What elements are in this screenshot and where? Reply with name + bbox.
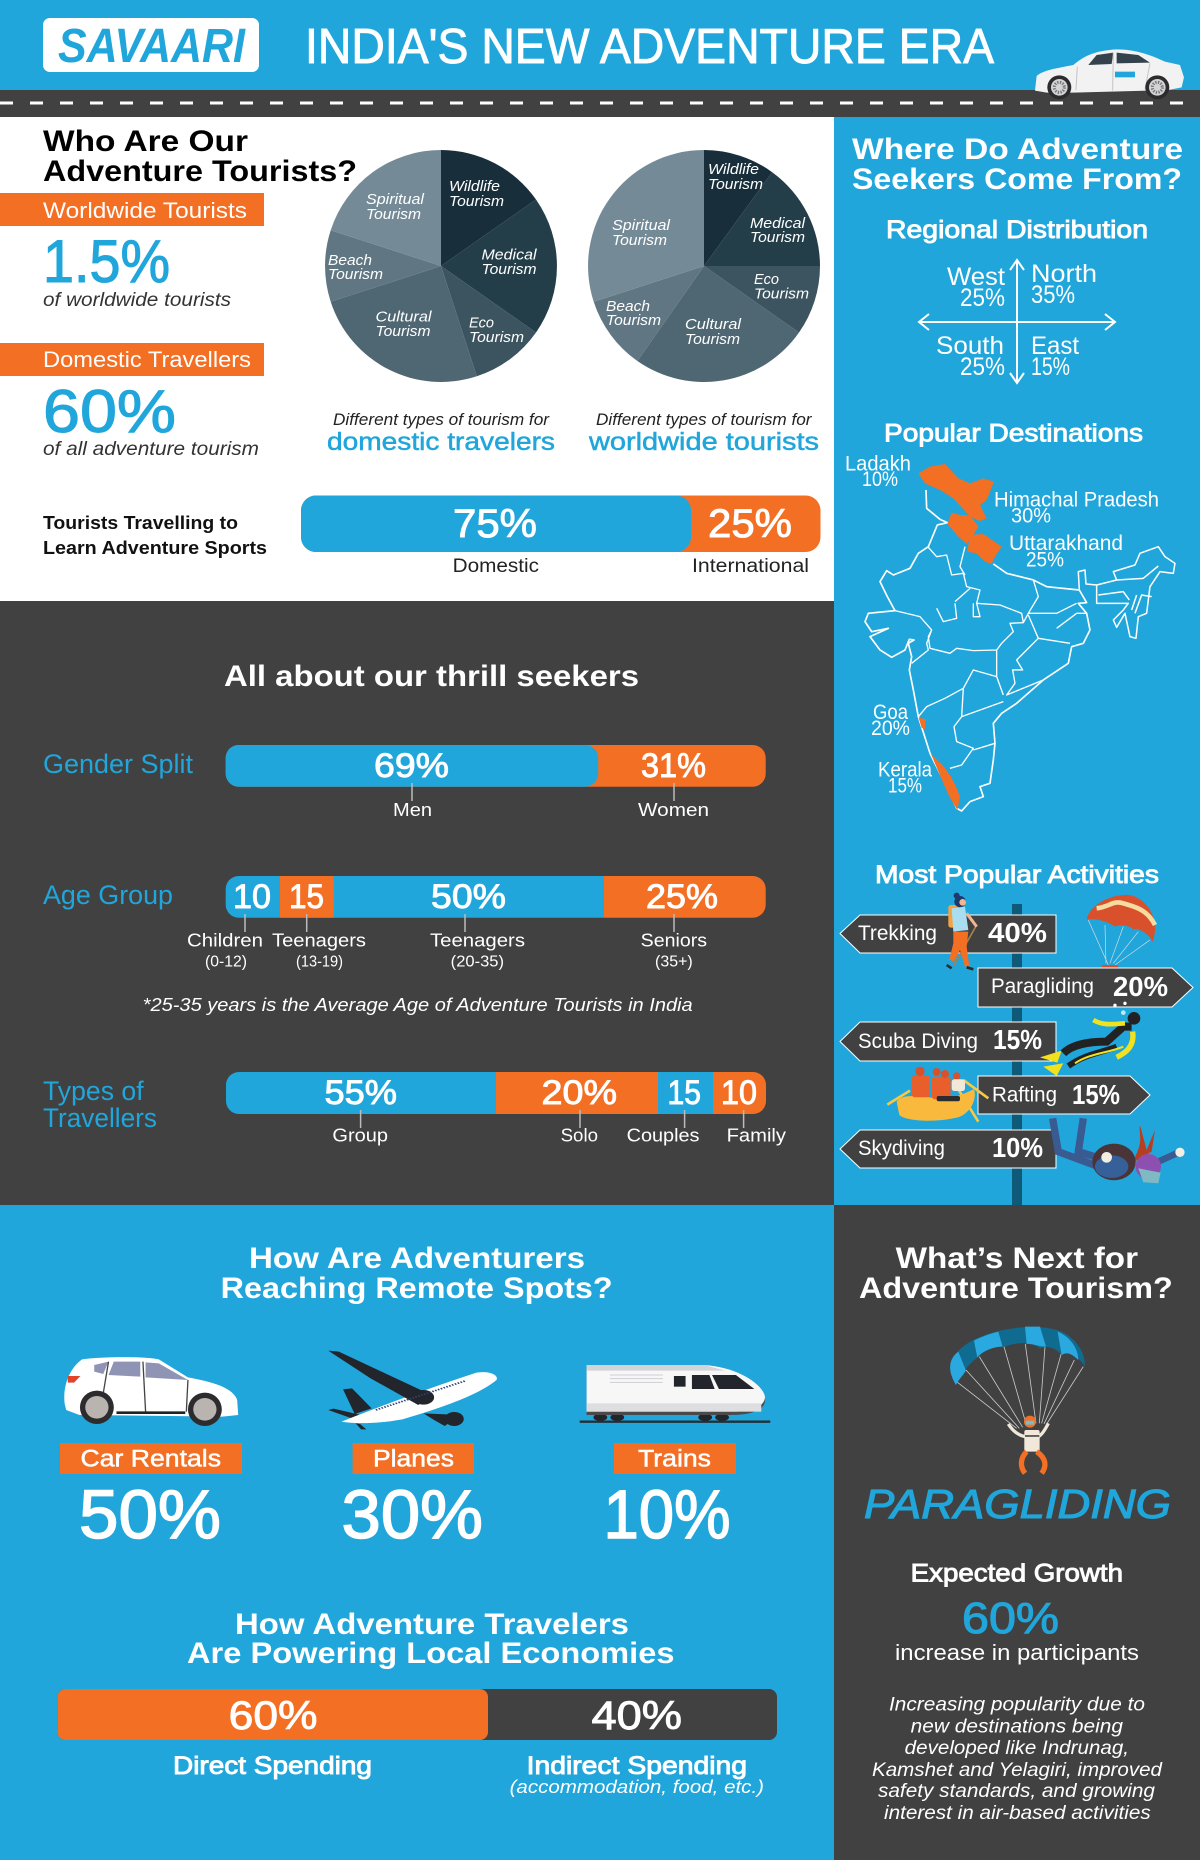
mode: trains [604, 1443, 736, 1553]
stat: expected growth [895, 1560, 1139, 1665]
pie chart: domestic travelers [325, 150, 557, 382]
heading: reaching remote spots: How Are Adventurers [249, 1242, 585, 1275]
chart: regional compass: North [1031, 260, 1097, 288]
map: India with highlighted states [865, 464, 1175, 811]
panel: reaching remote spots and local economies [0, 1205, 834, 1860]
pie chart: worldwide tourists: Tourism [685, 332, 740, 348]
heading: Adventure Tourists? [43, 155, 357, 188]
text block: growth reasons: developed like Indrunag, [905, 1738, 1129, 1759]
heading: Where Do Adventure [852, 133, 1183, 166]
logo: Savaari: SAVAARI [58, 20, 246, 73]
pie chart: worldwide tourists: Tourism [750, 230, 805, 246]
chart: types of travellers: 20% [542, 1074, 617, 1112]
stat: domestic travellers: 60% [43, 378, 176, 445]
chart: regional compass: 15% [1031, 353, 1070, 381]
illustration: skydiver [1053, 1118, 1185, 1183]
text block: growth reasons [872, 1694, 1164, 1824]
heading: local economies [187, 1608, 674, 1670]
chart: gender split: Men [393, 800, 432, 820]
chart: gender split: 31% [641, 747, 706, 785]
pie chart: domestic travelers: Beach [328, 253, 372, 269]
chart: age group: 10 [233, 878, 271, 916]
map labels: Kerala [878, 758, 932, 782]
icon: train [580, 1365, 770, 1422]
chart: types of travellers: Family [727, 1126, 786, 1146]
chart: gender split: Women [638, 800, 709, 820]
pie chart: domestic travelers: Cultural [376, 310, 432, 326]
stat: worldwide tourists: 1.5% [43, 228, 170, 295]
pie chart: worldwide tourists [588, 150, 820, 382]
stat: domestic travellers: Domestic Travellers [43, 347, 251, 372]
heading [859, 1242, 1173, 1305]
map labels: 20% [871, 717, 910, 740]
panel: all about our thrill seekers [0, 601, 834, 1205]
heading: All about our thrill seekers [224, 660, 639, 693]
chart: age group: Age Group [43, 880, 173, 910]
text block: growth reasons: new destinations being [911, 1716, 1123, 1738]
illustration: paraglider red [1087, 895, 1155, 976]
text block: growth reasons: Kamshet and Yelagiri, improved [872, 1760, 1164, 1781]
panel: who are our adventure tourists [0, 117, 834, 601]
mode: car rentals: Car Rentals [80, 1446, 221, 1472]
icon: white SUV [64, 1357, 238, 1426]
chart: age group: Teenagers [272, 930, 366, 950]
map labels: 25% [1026, 548, 1064, 572]
heading: most popular activities: Most Popular Activities [875, 861, 1159, 889]
map labels: 30% [1011, 504, 1051, 528]
stat: worldwide tourists: Worldwide Tourists [43, 198, 247, 223]
note: average age: *25-35 years is the Average Age of Adventure Tourists in India [143, 995, 693, 1015]
caption: worldwide tourists [588, 411, 819, 456]
mode: car rentals [60, 1443, 242, 1553]
pie chart: worldwide tourists: Tourism [708, 177, 763, 193]
chart: types of travellers: Travellers [43, 1103, 157, 1133]
chart: regional compass: East [1031, 332, 1079, 360]
chart: age group: 15 [289, 878, 324, 916]
heading: local economies: How Adventure Travelers [235, 1608, 629, 1641]
chart: types of travellers: 10 [721, 1074, 757, 1112]
illustration: paraglider blue [950, 1327, 1085, 1473]
pie chart: worldwide tourists: Tourism [606, 313, 661, 329]
chart: age group: Seniors [641, 930, 707, 950]
bar chart: domestic vs international: 75% [453, 502, 537, 546]
map labels: 15% [888, 774, 922, 798]
heading: Who Are Our [43, 125, 248, 158]
sign: Paragliding [978, 968, 1193, 1007]
chart: age group: Children [187, 930, 263, 950]
bar chart: direct vs indirect spending: 60% [229, 1694, 318, 1738]
map labels: Himachal Pradesh [994, 488, 1159, 512]
stat: domestic travellers [0, 343, 264, 460]
map labels: 10% [862, 468, 898, 491]
bar chart: direct vs indirect spending: 40% [592, 1694, 682, 1738]
map labels: Uttarakhand [1009, 532, 1123, 555]
chart: age group: Teenagers [430, 930, 525, 950]
bar chart: direct vs indirect spending: (accommodation, food, etc.) [510, 1777, 764, 1797]
heading: Adventure Tourism? [859, 1272, 1173, 1305]
pie chart: worldwide tourists: Wildlife [708, 162, 759, 178]
stat: expected growth: 60% [962, 1594, 1059, 1643]
pie chart: domestic travelers: Wildlife [449, 179, 500, 195]
panel: what's next for adventure tourism [834, 1205, 1200, 1860]
pie chart: worldwide tourists: Tourism [612, 233, 667, 249]
sign: Rafting: Rafting [992, 1084, 1057, 1106]
map labels [845, 452, 1159, 798]
stat: domestic travellers: of all adventure tourism [43, 439, 259, 460]
text block: growth reasons: Increasing popularity due to [889, 1694, 1145, 1716]
chart: gender split [43, 745, 766, 820]
sign: Trekking: 40% [988, 917, 1047, 948]
mode: planes [342, 1443, 483, 1553]
chart: types of travellers: Types of [43, 1076, 144, 1106]
text block: growth reasons: safety standards, and growing [878, 1781, 1155, 1802]
pie chart: domestic travelers: Eco [469, 316, 494, 332]
chart: regional compass: 25% [960, 353, 1005, 381]
sign: Rafting [978, 1076, 1150, 1114]
stat: worldwide tourists [0, 193, 264, 311]
heading: What’s Next for [896, 1242, 1138, 1275]
icon: white sedan on road [1035, 49, 1184, 99]
pie chart: worldwide tourists: Medical [750, 216, 806, 232]
label: learn adventure sports: Tourists Travelling to [43, 513, 238, 533]
mode: planes: 30% [342, 1476, 483, 1553]
signpost pole [1012, 904, 1022, 1205]
stat: expected growth: increase in participants [895, 1640, 1139, 1665]
pie chart: worldwide tourists: Eco [754, 272, 779, 288]
mode: trains: Trains [638, 1446, 711, 1472]
chart: age group: 50% [431, 878, 506, 916]
pie chart: domestic travelers: Tourism [469, 330, 524, 346]
pie chart: worldwide tourists: Cultural [685, 317, 742, 333]
pie chart: domestic travelers: Spiritual [366, 192, 425, 208]
chart: regional compass: South [936, 332, 1004, 360]
chart: types of travellers [43, 1072, 786, 1146]
map labels: Goa [873, 701, 908, 724]
pie chart: domestic travelers: Medical [482, 248, 537, 264]
sign: Skydiving: 10% [992, 1132, 1043, 1163]
sign: Scuba Diving: 15% [993, 1024, 1042, 1055]
chart: types of travellers: 55% [324, 1074, 397, 1112]
header band [0, 0, 1200, 90]
pie chart: domestic travelers: Tourism [449, 194, 504, 210]
bar chart: domestic vs international [301, 496, 820, 577]
panel: where do adventure seekers come from [834, 117, 1200, 1205]
bar chart: domestic vs international: 25% [708, 502, 792, 546]
pie chart: worldwide tourists: Tourism [754, 286, 809, 302]
sign: Paragliding: Paragliding [991, 975, 1094, 998]
mode: trains: 10% [604, 1476, 730, 1553]
stat: expected growth: Expected Growth [911, 1560, 1123, 1588]
heading: local economies: Are Powering Local Economies [187, 1637, 674, 1670]
text block: growth reasons: interest in air-based activities [884, 1803, 1151, 1824]
illustration: hiker [947, 893, 977, 969]
bar chart: domestic vs international: International [692, 556, 809, 577]
pie chart: domestic travelers: Tourism [328, 267, 383, 283]
chart: age group: (20-35) [451, 954, 504, 970]
heading: reaching remote spots: Reaching Remote Spots? [221, 1272, 613, 1305]
road [0, 90, 1200, 117]
pie chart: domestic travelers: Tourism [482, 262, 536, 278]
chart: types of travellers: 15 [668, 1074, 701, 1112]
pie chart: worldwide tourists: Beach [606, 299, 650, 315]
chart: regional compass: 35% [1031, 281, 1075, 309]
pie chart: domestic travelers: Tourism [376, 324, 430, 340]
mode: car rentals: 50% [79, 1476, 221, 1553]
illustration: scuba diver [1040, 1002, 1140, 1076]
sign: Skydiving: Skydiving [858, 1137, 945, 1160]
title: INDIA'S NEW ADVENTURE ERA [305, 20, 994, 74]
chart: types of travellers: Group [332, 1126, 388, 1146]
stat: worldwide tourists: of worldwide tourists [43, 290, 232, 311]
bar chart: direct vs indirect spending: Direct Spending [173, 1752, 372, 1780]
sign: Skydiving [840, 1130, 1056, 1168]
caption: domestic travelers [327, 411, 555, 456]
chart: age group: (13-19) [296, 954, 343, 970]
pie chart: worldwide tourists: Spiritual [612, 218, 671, 234]
heading: reaching remote spots [221, 1242, 613, 1305]
bar chart: direct vs indirect spending [57, 1689, 777, 1797]
heading [852, 133, 1183, 196]
chart: age group: (35+) [655, 954, 693, 970]
caption: domestic travelers: domestic travelers [327, 428, 555, 456]
caption: worldwide tourists: Different types of tourism for [596, 411, 813, 429]
label: learn adventure sports: Learn Adventure Sports [43, 538, 267, 558]
sign: Scuba Diving: Scuba Diving [858, 1030, 978, 1053]
label: learn adventure sports [43, 513, 267, 558]
heading [43, 125, 357, 188]
chart: types of travellers: Couples [627, 1126, 700, 1146]
mode: planes: Planes [373, 1446, 454, 1472]
map labels: Ladakh [845, 452, 911, 476]
chart: regional compass [919, 260, 1115, 383]
caption: worldwide tourists: worldwide tourists [588, 428, 819, 456]
sign: Paragliding: 20% [1113, 971, 1168, 1002]
bar chart: domestic vs international: Domestic [453, 556, 539, 577]
bar chart: direct vs indirect spending: Indirect Spending [527, 1752, 747, 1780]
pie chart: domestic travelers: Tourism [366, 207, 421, 223]
chart: regional compass: 25% [960, 284, 1005, 312]
chart: age group [43, 876, 766, 970]
chart: types of travellers: Solo [561, 1126, 598, 1146]
chart: age group: (0-12) [205, 954, 247, 970]
sign: Trekking [840, 915, 1056, 953]
chart: regional compass: West [947, 263, 1005, 291]
icon: airplane [328, 1351, 497, 1429]
sign: Rafting: 15% [1072, 1079, 1120, 1110]
caption: domestic travelers: Different types of tourism for [333, 411, 551, 429]
chart: gender split: 69% [374, 747, 449, 785]
heading: regional distribution: Regional Distribution [886, 216, 1148, 244]
chart: age group: 25% [646, 878, 718, 916]
sign: Scuba Diving [840, 1022, 1056, 1061]
heading: popular destinations: Popular Destinations [884, 420, 1143, 448]
sign: Trekking: Trekking [858, 922, 937, 945]
heading: Seekers Come From? [852, 163, 1182, 196]
illustration: raft [887, 1067, 988, 1122]
chart: gender split: Gender Split [43, 749, 193, 779]
title: paragliding: PARAGLIDING [864, 1481, 1171, 1527]
